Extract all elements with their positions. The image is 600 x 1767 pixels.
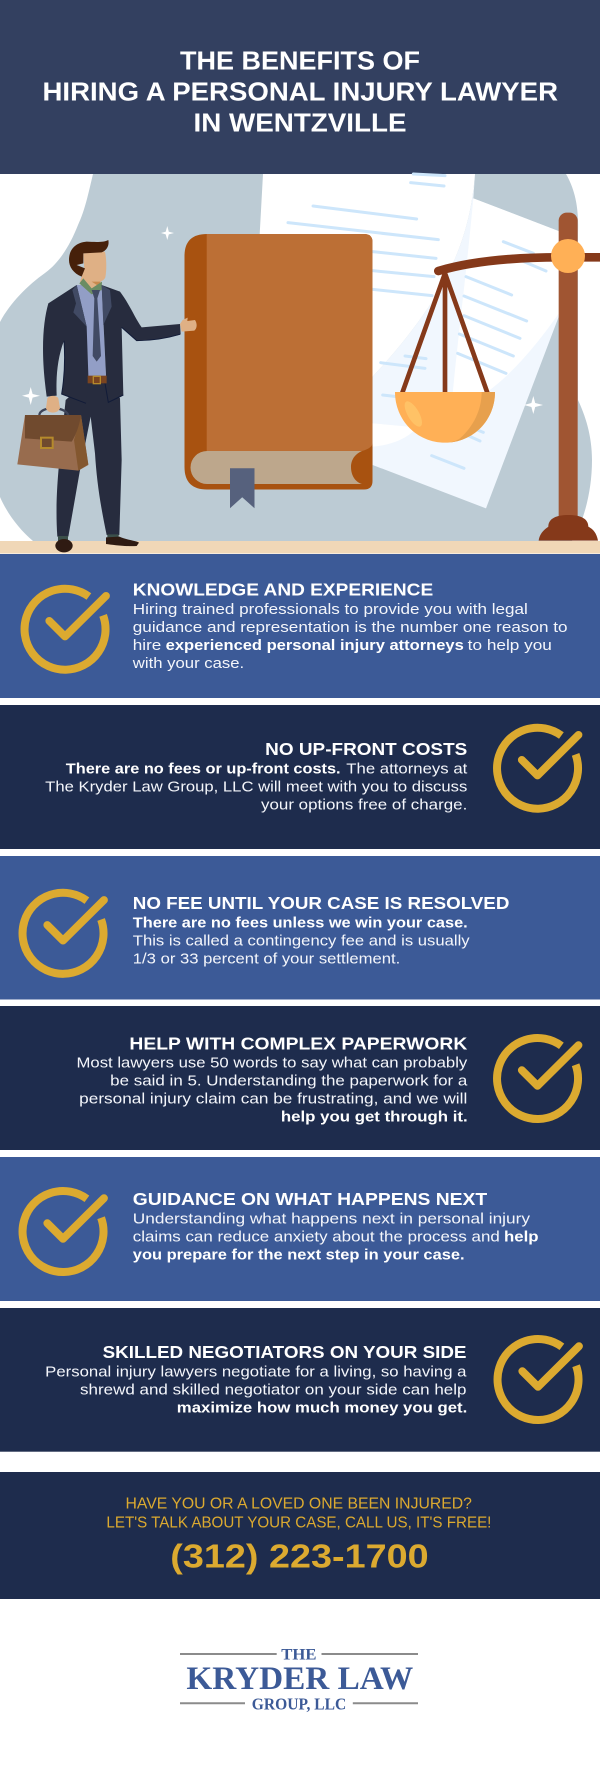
neck and face xyxy=(80,270,100,294)
panel: no up-front costs xyxy=(0,705,600,849)
body text: to help you xyxy=(468,638,552,654)
body text: with your case. xyxy=(132,656,244,672)
body text: personal injury claim can be frustrating, and we will xyxy=(79,1091,467,1107)
phone number: (312) 223-1700 xyxy=(170,1537,429,1574)
title: THE BENEFITS OF xyxy=(180,48,420,76)
hair xyxy=(69,240,109,277)
icon: check mark xyxy=(23,1191,104,1272)
title xyxy=(42,48,558,138)
bookmark xyxy=(230,468,254,508)
shoes xyxy=(55,539,73,552)
body text: help xyxy=(504,1229,539,1245)
left hand xyxy=(46,396,60,413)
body text: you prepare for the next step in your case. xyxy=(133,1247,465,1263)
logo: The Kryder Law Group, LLC: THE xyxy=(281,1646,316,1663)
lawyer figure xyxy=(17,240,197,552)
body text: Most lawyers use 50 words to say what can probably xyxy=(76,1055,468,1071)
icon: check mark xyxy=(497,1038,578,1119)
body text: There are no fees or up-front costs. xyxy=(66,761,341,777)
header banner xyxy=(0,0,600,174)
panel: knowledge and experience xyxy=(0,554,600,698)
belt xyxy=(88,376,107,383)
floor xyxy=(0,541,600,554)
trousers xyxy=(57,380,122,537)
body text: The Kryder Law Group, LLC will meet with you to discuss xyxy=(45,779,467,795)
logo: The Kryder Law Group, LLC: KRYDER LAW xyxy=(186,1661,413,1697)
body text: Hiring trained professionals to provide you with legal xyxy=(133,602,528,618)
panel: help with complex paperwork xyxy=(0,1006,600,1150)
body text: Understanding what happens next in personal injury xyxy=(133,1211,531,1227)
logo: The Kryder Law Group, LLC xyxy=(180,1646,418,1713)
call to action text: LET'S TALK ABOUT YOUR CASE, CALL US, IT'S FREE! xyxy=(106,1515,491,1532)
body text: There are no fees unless we win your case. xyxy=(133,915,468,931)
heading: HELP WITH COMPLEX PAPERWORK xyxy=(129,1033,468,1053)
scales of justice xyxy=(395,213,600,541)
panel: skilled negotiators on your side xyxy=(0,1308,600,1452)
body text xyxy=(45,761,467,813)
body text xyxy=(132,602,568,672)
heading: NO FEE UNTIL YOUR CASE IS RESOLVED xyxy=(133,893,509,913)
body text xyxy=(76,1055,468,1125)
body text: be said in 5. Understanding the paperwork for a xyxy=(110,1073,468,1089)
background blob xyxy=(0,174,592,541)
jacket xyxy=(43,285,88,403)
collar xyxy=(79,278,102,294)
icon: check mark xyxy=(497,728,578,809)
briefcase xyxy=(39,408,68,415)
body text xyxy=(45,1365,468,1417)
call to action text xyxy=(106,1496,491,1532)
title: IN WENTZVILLE xyxy=(194,110,406,138)
panel: no fee until your case is resolved xyxy=(0,856,600,1000)
title: HIRING A PERSONAL INJURY LAWYER xyxy=(42,78,558,106)
body text: your options free of charge. xyxy=(261,797,467,813)
sparkles xyxy=(22,226,543,414)
heading: NO UP-FRONT COSTS xyxy=(265,739,467,759)
body text: guidance and representation is the number one reason to xyxy=(133,620,568,636)
icon: check mark xyxy=(23,893,104,974)
icon: check mark xyxy=(25,589,106,670)
law book xyxy=(184,234,372,508)
call to action text: HAVE YOU OR A LOVED ONE BEEN INJURED? xyxy=(126,1496,472,1513)
heading: GUIDANCE ON WHAT HAPPENS NEXT xyxy=(133,1189,488,1209)
body text: hire xyxy=(133,638,161,654)
logo: The Kryder Law Group, LLC: GROUP, LLC xyxy=(252,1694,346,1713)
tie xyxy=(92,290,101,362)
shirt xyxy=(77,285,106,377)
panel: guidance on what happens next xyxy=(0,1157,600,1301)
body text: Personal injury lawyers negotiate for a living, so having a xyxy=(45,1365,468,1381)
body text: 1/3 or 33 percent of your settlement. xyxy=(133,951,400,967)
body text: shrewd and skilled negotiator on your side can help xyxy=(80,1383,466,1399)
body text: maximize how much money you get. xyxy=(177,1401,467,1417)
heading: SKILLED NEGOTIATORS ON YOUR SIDE xyxy=(103,1342,467,1362)
body text: The attorneys at xyxy=(346,761,467,777)
body text xyxy=(133,1211,539,1263)
documents xyxy=(250,174,560,508)
illustration: lawyer, law book and scales xyxy=(0,174,600,554)
body text: claims can reduce anxiety about the process and xyxy=(133,1229,500,1245)
body text xyxy=(133,915,470,967)
call to action panel xyxy=(0,1472,600,1599)
body text: experienced personal injury attorneys xyxy=(166,638,464,654)
body text: This is called a contingency fee and is usually xyxy=(133,933,470,949)
heading: KNOWLEDGE AND EXPERIENCE xyxy=(133,580,433,600)
right hand xyxy=(180,318,197,332)
icon: check mark xyxy=(498,1339,579,1420)
body text: help you get through it. xyxy=(281,1109,468,1125)
